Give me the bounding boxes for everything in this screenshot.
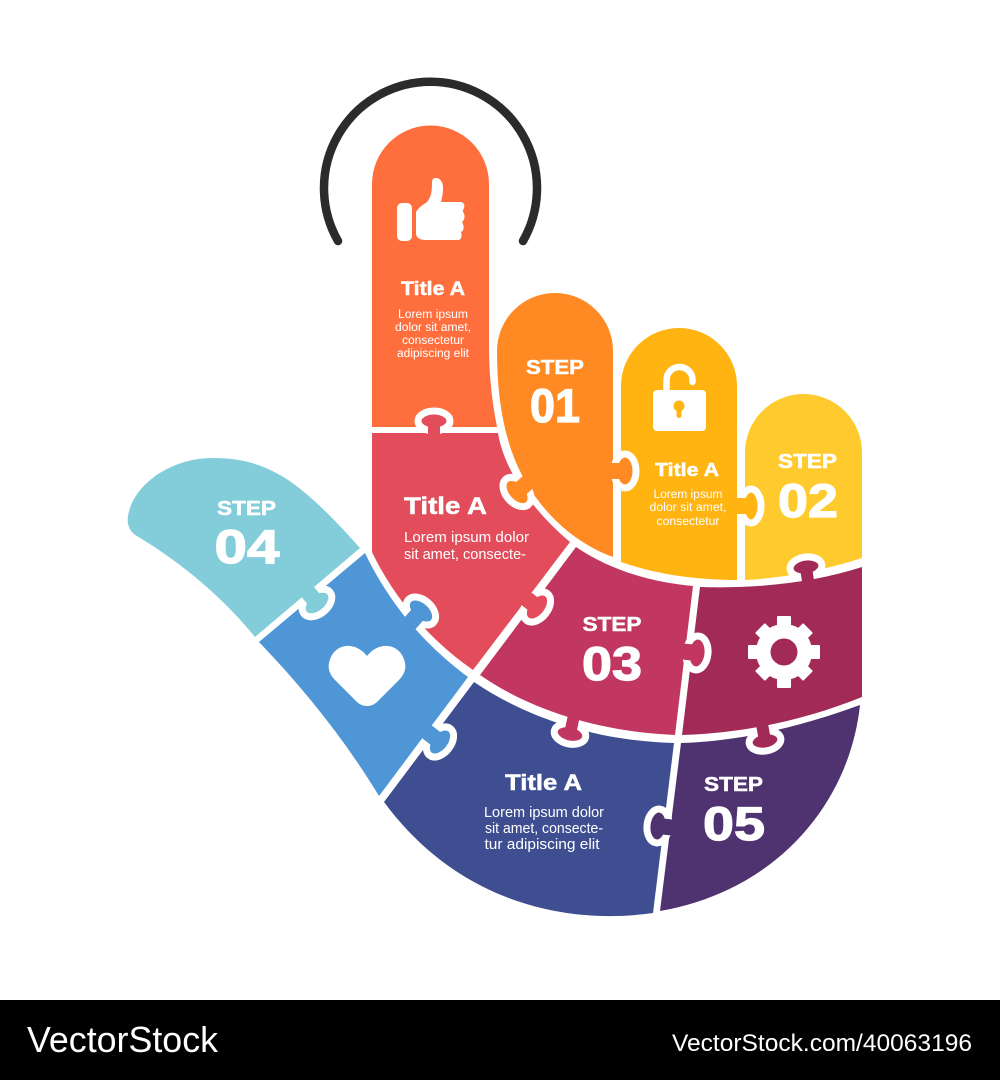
panel: gear [682, 567, 862, 735]
step label: STEP [526, 356, 584, 379]
body text: Lorem ipsum [654, 489, 722, 501]
step label: STEP [582, 613, 642, 636]
body text: Lorem ipsum dolor [484, 805, 604, 821]
icon: heart [329, 646, 405, 706]
image id: VectorStock.com/40063196 [672, 1030, 972, 1057]
body text: dolor sit amet, [395, 322, 471, 334]
watermark footer bar [0, 1000, 1000, 1080]
step label: STEP [778, 450, 837, 473]
body text: Lorem ipsum [398, 309, 468, 321]
body text: Lorem ipsum dolor [404, 529, 529, 546]
brand name: VectorStock [27, 1019, 219, 1060]
title: Title A [505, 770, 582, 795]
body text: dolor sit amet, [650, 502, 726, 514]
step number: 05 [703, 797, 765, 850]
panel: step 03 [480, 547, 693, 735]
touch arc above finger [324, 82, 537, 241]
body text [404, 529, 529, 563]
panel: title A navy [384, 682, 674, 916]
body text: consectetur [402, 335, 464, 347]
panel: step 02 finger [745, 394, 862, 580]
panel: heart blue [259, 553, 468, 796]
panel: step 04 teal [128, 458, 360, 637]
body text: sit amet, consecte- [485, 821, 603, 837]
body text: adipiscing elit [397, 348, 470, 360]
step number: 04 [214, 520, 280, 573]
step number: 01 [530, 379, 580, 432]
body text: sit amet, consecte- [404, 546, 526, 563]
panel: step 05 purple [660, 705, 860, 911]
puzzle knobs [292, 411, 824, 845]
step label: STEP [217, 497, 276, 520]
step number: 03 [582, 637, 642, 690]
step number: 02 [778, 474, 838, 527]
panel: title A red [372, 433, 570, 670]
body text [650, 489, 726, 528]
body text: consectetur [656, 516, 720, 528]
body text [395, 309, 471, 360]
icon: thumbs up [397, 178, 464, 241]
body text [484, 805, 604, 853]
icon: gear [748, 616, 820, 688]
body text: tur adipiscing elit [484, 837, 600, 853]
panel: lock finger [621, 328, 737, 580]
panel: step 01 finger [497, 293, 613, 557]
title: Title A [655, 460, 719, 480]
panel: index finger [372, 126, 497, 427]
title: Title A [404, 493, 487, 520]
step label: STEP [704, 773, 763, 796]
title: Title A [401, 279, 465, 300]
icon: open padlock [653, 367, 706, 431]
